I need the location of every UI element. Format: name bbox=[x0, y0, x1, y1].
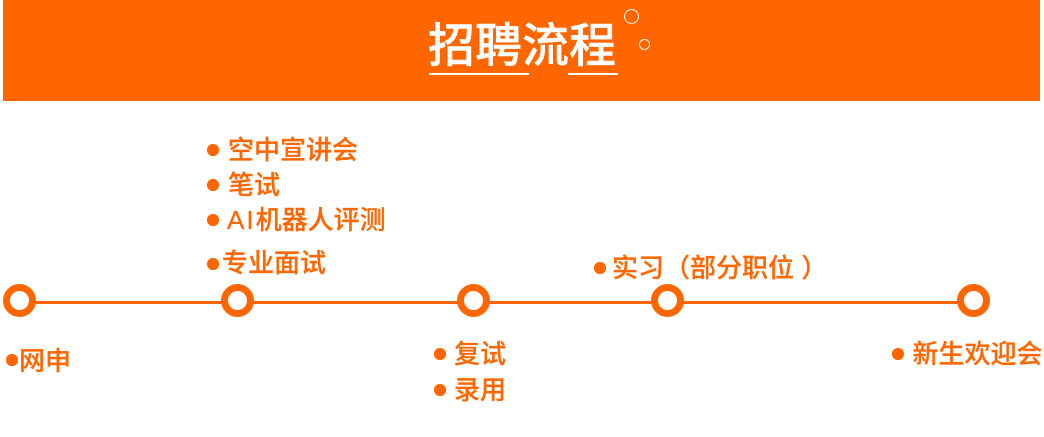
step 5 label: 新生欢迎会 bbox=[912, 339, 1043, 369]
node 4 bbox=[651, 284, 684, 317]
step 2 labels: AI机器人评测 bbox=[227, 205, 386, 235]
header banner bbox=[3, 0, 1040, 101]
node 5 bbox=[957, 284, 990, 317]
timeline line bbox=[19, 301, 979, 304]
step 3 labels: 录用 bbox=[454, 375, 506, 405]
title underline right bbox=[568, 73, 618, 75]
node 1 bbox=[3, 284, 36, 317]
step 2 labels: 专业面试 bbox=[222, 248, 326, 278]
decorative circle small bbox=[639, 39, 650, 50]
timeline bbox=[36, 301, 958, 304]
step 1 label: 网申: 网申 bbox=[19, 346, 71, 376]
step 3 labels: 复试 bbox=[454, 339, 506, 369]
step 2 labels: 空中宣讲会 bbox=[228, 135, 358, 165]
node 3 bbox=[457, 284, 490, 317]
step 2 labels: 笔试 bbox=[228, 170, 280, 200]
decorative circle large bbox=[624, 9, 639, 24]
node 2 bbox=[221, 284, 254, 317]
title: 招聘流程 bbox=[428, 19, 616, 72]
step 4 label: 实习（部分职位 ） bbox=[612, 253, 827, 283]
step 3 labels bbox=[434, 339, 506, 405]
title underline left bbox=[429, 73, 529, 75]
step 2 labels bbox=[207, 135, 386, 278]
